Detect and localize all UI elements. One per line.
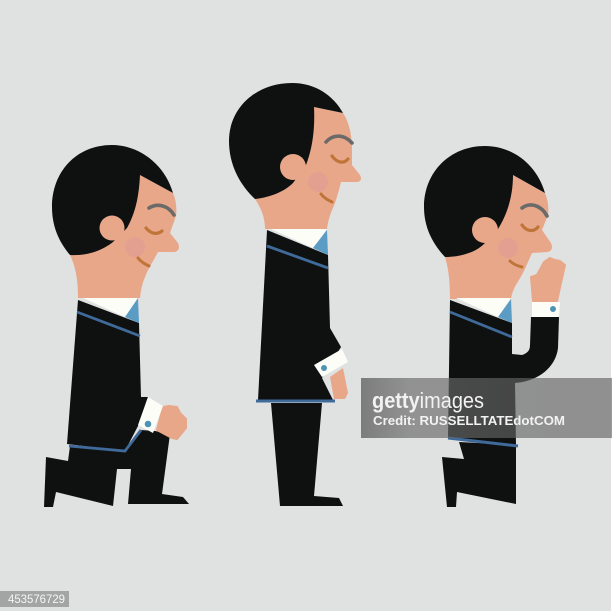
mouth [510,261,522,267]
figure: praying businessman [424,146,565,507]
shirt cuff [532,302,560,317]
shirt cuff [314,349,348,377]
lapel stripe [267,246,328,268]
eyebrow [149,205,174,215]
lapel stripe [77,312,140,336]
image id tag [0,591,69,607]
closed eye [332,156,348,162]
shirt collar [83,298,138,317]
watermark credit: Credit: RUSSELLTATEdotCOM [373,414,565,428]
hem stripe [69,430,141,451]
jacket and raised arm [448,300,559,445]
lapel stripe [450,312,512,337]
ear [280,154,306,180]
ear [100,216,124,240]
hair [229,83,343,199]
eyebrow [326,136,352,143]
head: kneeling man [52,145,179,298]
mouth [138,258,149,266]
head: praying man [424,146,552,299]
shirt cuff [138,397,163,433]
eyebrow [522,205,547,216]
legs [442,442,516,507]
praying hand [531,258,565,301]
image id tag: 453576729 [8,594,65,606]
cheek [125,237,145,257]
hand [157,406,186,439]
shirt collar [456,298,511,317]
hem stripe [256,400,335,402]
cheek [498,238,518,258]
hem stripe [448,438,518,446]
cufflink [321,365,327,371]
hand [330,368,348,399]
closed eye [146,228,162,233]
cufflink [145,421,151,427]
ear [472,217,498,243]
cufflink [550,306,556,312]
tie [125,298,139,323]
mouth [321,194,332,202]
closed eye [522,225,538,231]
hair [52,145,173,255]
figure: kneeling businessman [44,145,189,507]
head: standing man [229,83,361,229]
watermark banner [361,378,612,438]
shirt collar [271,229,327,248]
hair [424,146,545,257]
jacket [67,300,148,451]
watermark logo: gettyimages [372,388,484,413]
cheek [308,172,328,192]
legs [271,403,343,506]
tie [313,230,328,255]
tie [498,299,512,323]
figure: standing businessman [229,83,361,506]
jacket [258,230,341,400]
legs [44,430,189,507]
